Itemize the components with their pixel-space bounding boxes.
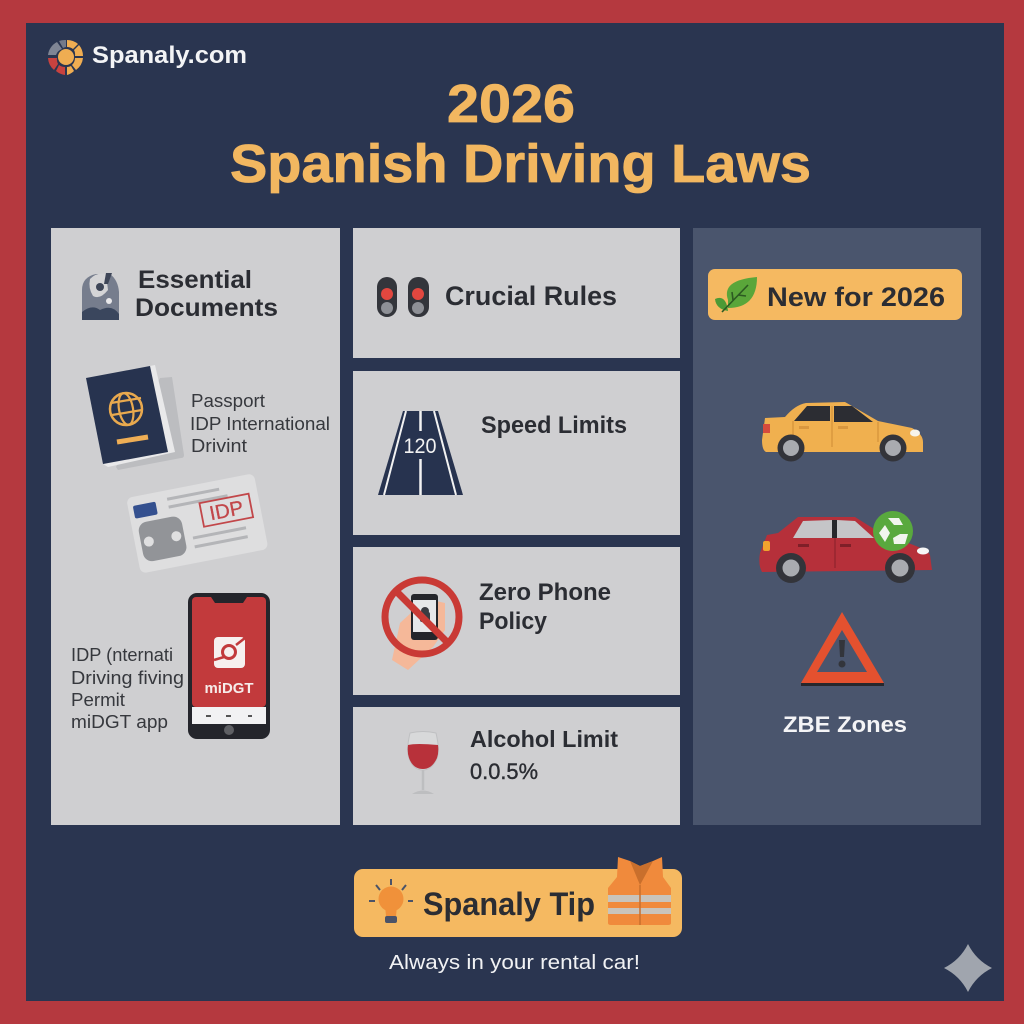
text: passport list: Passport — [191, 391, 265, 411]
panel: new for 2026 — [693, 228, 981, 825]
icon: red car with recycle badge — [759, 511, 932, 583]
icon: light bulb — [369, 879, 413, 923]
text: passport list: IDP International — [190, 414, 330, 434]
logo: Spanaly.com — [48, 40, 247, 75]
callout: spanaly tip — [354, 857, 682, 937]
heading: zero phone policy: Zero Phone — [479, 579, 611, 606]
text: IDP and app list: Driving fiving — [71, 668, 184, 688]
heading: essential documents: Essential — [138, 266, 252, 294]
panel: crucial rules — [353, 228, 680, 358]
icon: miDGT phone: miDGT — [204, 680, 254, 697]
badge: new for 2026: New for 2026 — [767, 282, 945, 312]
heading: speed limits: Speed Limits — [481, 412, 627, 439]
logo: Spanaly.com: Spanaly.com — [92, 42, 247, 69]
text: IDP and app list: IDP (nternati — [71, 645, 173, 665]
panel: zero phone policy — [353, 547, 680, 695]
heading: zero phone policy — [479, 579, 611, 635]
icon: no phone — [385, 580, 459, 670]
text: always in your rental car: Always in your rental car! — [389, 952, 640, 974]
panel: speed limits — [353, 371, 680, 535]
icon: miDGT phone — [188, 593, 270, 739]
icon: IDP card — [126, 473, 268, 574]
text: IDP and app list — [71, 645, 184, 732]
text: passport list: Drivint — [191, 436, 247, 456]
title: 2026 — [447, 74, 575, 134]
icon: warning triangle — [801, 612, 884, 686]
icon: document emblem — [82, 273, 119, 320]
panel: essential documents — [51, 228, 340, 825]
badge: new for 2026 — [708, 269, 962, 320]
heading: alcohol limit — [470, 726, 618, 784]
text: passport list — [190, 391, 330, 456]
heading: alcohol limit: Alcohol Limit — [470, 726, 618, 752]
icon: passport — [86, 365, 184, 470]
icon: safety vest — [608, 857, 671, 925]
heading: crucial rules: Crucial Rules — [445, 281, 617, 311]
heading: essential documents: Documents — [135, 294, 278, 322]
text: IDP and app list: miDGT app — [71, 712, 168, 732]
icon: road 120 — [378, 411, 463, 495]
icon: traffic lights — [377, 277, 429, 317]
title — [230, 74, 811, 194]
icon: sparkle — [944, 944, 992, 992]
text: ZBE zones: ZBE Zones — [783, 712, 907, 737]
callout: spanaly tip: Spanaly Tip — [423, 886, 595, 922]
heading: zero phone policy: Policy — [479, 608, 548, 635]
title: Spanish Driving Laws — [230, 134, 811, 194]
icon: wine glass — [408, 732, 438, 794]
heading: essential documents — [135, 266, 278, 322]
icon: road 120: 120 — [404, 435, 436, 458]
icon: yellow car — [762, 402, 923, 462]
icon: IDP card: IDP — [208, 497, 245, 525]
panel: alcohol limit — [353, 707, 680, 825]
heading: alcohol limit: 0.0.5% — [470, 759, 538, 784]
text: IDP and app list: Permit — [71, 690, 125, 710]
